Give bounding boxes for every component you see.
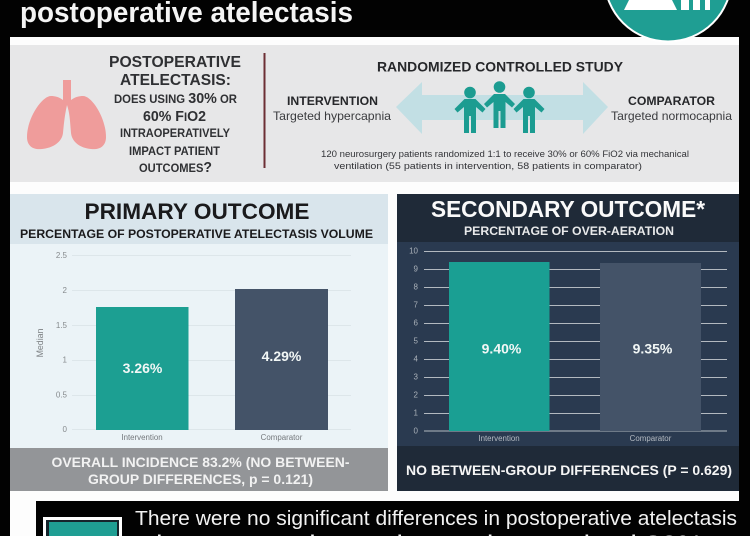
double arrow bbox=[396, 82, 608, 134]
question text: INTRAOPERATIVELY bbox=[120, 128, 230, 140]
bar chart: secondary: 9.35% bbox=[633, 340, 673, 356]
bar chart: primary: 1 bbox=[63, 356, 68, 364]
conclusion icon bbox=[43, 517, 122, 536]
bar chart: secondary: 9 bbox=[414, 264, 419, 274]
icon: lungs bbox=[27, 80, 106, 149]
question text: IMPACT PATIENT bbox=[129, 146, 220, 158]
panel: study overview bbox=[10, 45, 739, 182]
bar chart: secondary: 9.40% bbox=[482, 340, 522, 356]
bar chart: primary: 1.5 bbox=[56, 321, 68, 330]
question text: OUTCOMES? bbox=[139, 160, 212, 176]
primary heading: PRIMARY OUTCOME bbox=[84, 199, 310, 224]
bar chart: secondary: 6 bbox=[414, 318, 419, 328]
comparator label: Targeted normocapnia bbox=[611, 109, 732, 123]
bar chart: primary: Median bbox=[35, 328, 45, 357]
bar chart: secondary: Intervention bbox=[478, 434, 520, 443]
bar chart: secondary: 5 bbox=[414, 336, 419, 346]
divider bbox=[264, 53, 266, 168]
comparator label: COMPARATOR bbox=[628, 94, 715, 108]
bar chart: secondary: 1 bbox=[414, 408, 419, 418]
comparator label bbox=[611, 94, 732, 123]
bar chart: primary bbox=[35, 251, 351, 442]
question text: 60% FIO2 bbox=[143, 109, 206, 125]
bar chart: secondary bbox=[409, 246, 727, 443]
secondary heading: SECONDARY OUTCOME* bbox=[431, 196, 705, 222]
bar chart: secondary: 0 bbox=[414, 426, 419, 436]
icon: three people bbox=[454, 81, 544, 133]
panel: primary outcome bbox=[10, 194, 388, 491]
question text: ATELECTASIS: bbox=[120, 72, 231, 89]
secondary footer: NO BETWEEN-GROUP DIFFERENCES (P = 0.629) bbox=[406, 463, 732, 478]
logo badge bbox=[604, 0, 732, 42]
secondary footer bbox=[397, 446, 739, 491]
bar chart: secondary: 3 bbox=[414, 372, 419, 382]
panel: secondary outcome bbox=[397, 194, 739, 491]
intervention label: INTERVENTION bbox=[287, 94, 378, 108]
bar chart: primary: 0.5 bbox=[56, 390, 68, 400]
question text: DOES USING 30% OR bbox=[114, 91, 238, 107]
intervention label bbox=[273, 94, 391, 123]
bar chart: primary: Intervention bbox=[121, 433, 163, 442]
intervention label: Targeted hypercapnia bbox=[273, 109, 391, 123]
bar chart: primary: 3.26% bbox=[123, 360, 163, 376]
bar chart: secondary: 10 bbox=[409, 246, 419, 256]
question text: POSTOPERATIVE bbox=[109, 54, 241, 71]
bar chart: secondary: 8 bbox=[414, 282, 419, 292]
study heading: RANDOMIZED CONTROLLED STUDY bbox=[377, 58, 624, 74]
conclusion text: There were no significant differences in postoperative atelectasis bbox=[135, 507, 737, 530]
bar chart: primary: 4.29% bbox=[262, 348, 302, 364]
bar chart: secondary: 4 bbox=[414, 354, 419, 364]
bar chart: secondary: 7 bbox=[414, 300, 419, 310]
study description bbox=[321, 149, 689, 171]
bar chart: primary: 2.5 bbox=[56, 251, 68, 260]
primary footer: GROUP DIFFERENCES, p = 0.121) bbox=[88, 472, 313, 487]
study description: 120 neurosurgery patients randomized 1:1 to receive 30% or 60% FiO2 via mechanical bbox=[321, 149, 689, 159]
question text bbox=[109, 54, 241, 176]
study description: ventilation (55 patients in intervention, 58 patients in comparator) bbox=[334, 161, 642, 171]
primary footer bbox=[10, 448, 388, 491]
bar chart: primary: Comparator bbox=[261, 433, 303, 442]
primary footer: OVERALL INCIDENCE 83.2% (NO BETWEEN- bbox=[52, 455, 350, 470]
bar chart: primary: 2 bbox=[63, 286, 68, 295]
bar chart: secondary: Comparator bbox=[630, 434, 672, 443]
primary subheading: PERCENTAGE OF POSTOPERATIVE ATELECTASIS VOLUME bbox=[20, 227, 373, 241]
bar chart: primary: 0 bbox=[63, 425, 68, 434]
bar chart: secondary: 2 bbox=[414, 390, 419, 400]
secondary subheading: PERCENTAGE OF OVER-AERATION bbox=[464, 224, 674, 238]
